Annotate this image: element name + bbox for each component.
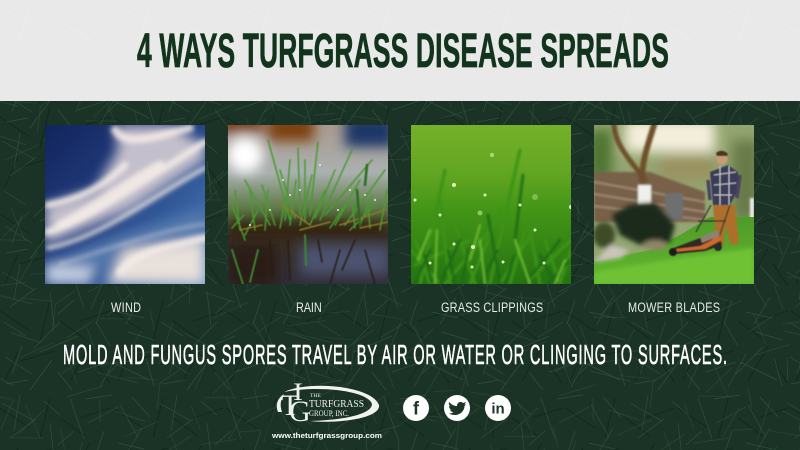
icon: facebook <box>403 395 429 421</box>
photo: mower blades, man mowing a lawn <box>588 120 760 284</box>
fence <box>594 172 754 222</box>
logo: The Turfgrass Group <box>277 379 379 428</box>
logo: The Turfgrass Group: T <box>281 389 299 422</box>
photo: wind, clouds in blue sky <box>45 125 205 284</box>
icon: linkedin <box>485 395 511 421</box>
logo: The Turfgrass Group: TURFGRASS <box>309 399 364 410</box>
panel: title band <box>0 0 800 101</box>
tree <box>614 125 654 180</box>
caption: MOLD AND FUNGUS SPORES TRAVEL BY AIR OR WATER OR CLINGING TO SURFACES. <box>63 339 727 370</box>
logo: The Turfgrass Group: G <box>289 395 311 428</box>
icon: linkedin: in <box>491 400 505 418</box>
logo: The Turfgrass Group: THE <box>310 393 321 399</box>
label: mower blades: MOWER BLADES <box>628 300 720 315</box>
logo: The Turfgrass Group: I <box>293 379 303 406</box>
panel: grass background <box>0 100 800 450</box>
shrubs and rocks <box>593 203 675 262</box>
label: grass clippings: GRASS CLIPPINGS <box>441 300 543 315</box>
man and mower <box>669 151 740 256</box>
title: 4 WAYS TURFGRASS DISEASE SPREADS <box>137 25 669 78</box>
icon: twitter <box>444 395 470 421</box>
photo: grass clippings, dewy blades <box>411 125 573 284</box>
lawn <box>594 217 754 284</box>
logo: The Turfgrass Group: GROUP, INC. <box>309 409 349 418</box>
label: rain: RAIN <box>296 300 322 315</box>
label: wind: WIND <box>111 300 141 315</box>
icon: facebook: f <box>413 398 420 418</box>
website url: www.theturfgrassgroup.com <box>271 431 382 440</box>
photo: rain, grass in flooded water <box>228 125 388 284</box>
